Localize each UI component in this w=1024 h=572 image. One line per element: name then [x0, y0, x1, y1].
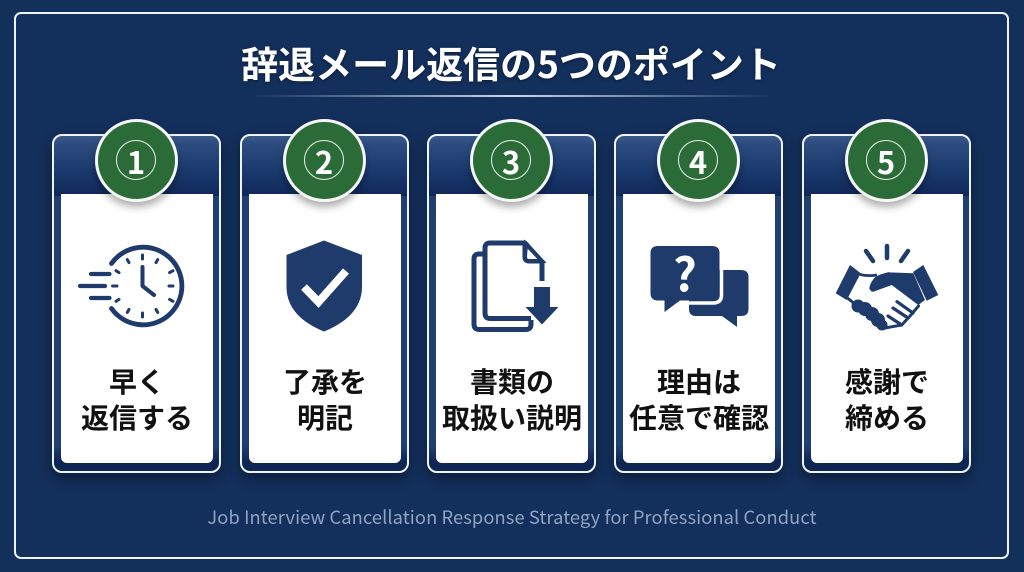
number badge 5 — [845, 119, 928, 202]
label 5: 感謝で — [845, 361, 929, 401]
label 5 — [845, 361, 929, 437]
number badge 3 — [470, 119, 553, 202]
number badge 4: 4 — [689, 138, 707, 183]
number badge 1 — [95, 119, 178, 202]
icon: documents with download arrow — [472, 240, 558, 332]
panel: point 5 — [798, 119, 976, 482]
label 3 — [442, 361, 582, 437]
panel: point 3 — [422, 119, 600, 482]
number badge 5: 5 — [877, 138, 895, 183]
number badge 1: 1 — [127, 138, 145, 183]
label 1 — [81, 361, 193, 437]
label 5: 締める — [845, 397, 929, 437]
title: 辞退メール返信の5つのポイント — [241, 35, 781, 89]
label 4: 任意で確認 — [629, 397, 769, 437]
number badge 2 — [283, 119, 366, 202]
icon: handshake — [836, 244, 938, 330]
label 1: 早く — [109, 361, 165, 401]
number badge 3: 3 — [502, 138, 520, 183]
label 3: 書類の — [470, 361, 554, 401]
panel: point 1 — [48, 119, 226, 482]
number badge 4 — [657, 119, 740, 202]
footer subtitle: Job Interview Cancellation Response Strategy for Professional Conduct — [207, 504, 817, 530]
panel: point 4 — [610, 119, 788, 482]
label 4: 理由は — [657, 361, 741, 401]
label 2 — [283, 361, 367, 437]
label 1: 返信する — [81, 397, 193, 437]
icon: shield check — [286, 240, 362, 332]
label 2: 明記 — [297, 397, 353, 437]
panel: point 2 — [236, 119, 414, 482]
label 4 — [629, 361, 769, 437]
label 2: 了承を — [283, 361, 367, 401]
number badge 2: 2 — [315, 138, 333, 183]
label 3: 取扱い説明 — [442, 397, 582, 437]
icon: question chat bubbles — [650, 244, 748, 327]
icon: fast clock — [78, 244, 184, 328]
